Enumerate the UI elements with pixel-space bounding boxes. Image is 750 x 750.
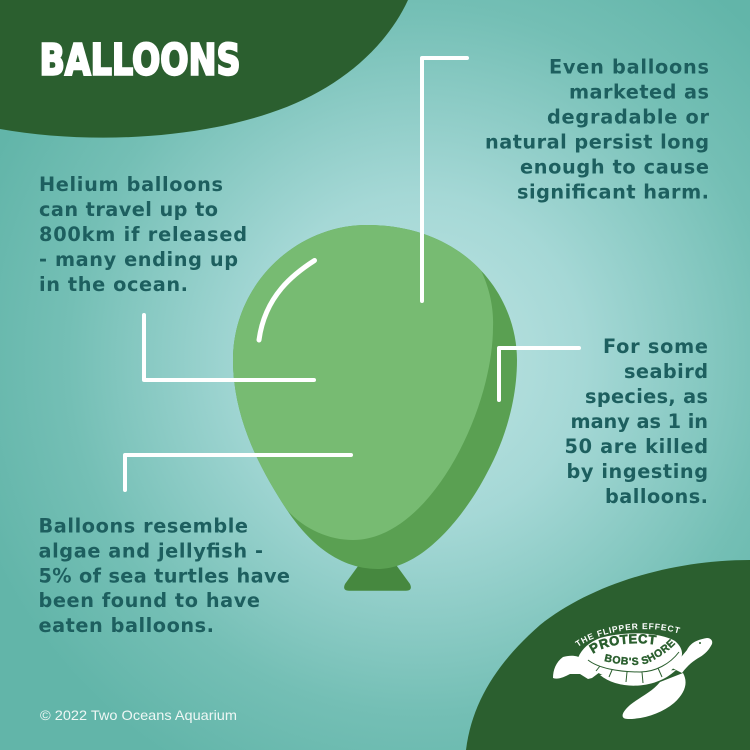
text: seabird species: many as 1 in	[570, 410, 708, 433]
balloon illustration	[233, 225, 517, 591]
text: seabird species: seabird	[624, 360, 708, 383]
text: degradable balloons: enough to cause	[520, 156, 709, 178]
text: sea turtles: been found to have	[38, 589, 260, 612]
turtle rear flipper	[553, 656, 600, 679]
text: helium balloons: can travel up to	[39, 198, 218, 221]
text: helium balloons: - many ending up	[39, 248, 238, 271]
text: seabird species	[564, 335, 708, 508]
text: degradable balloons: marketed as	[569, 80, 709, 104]
text: sea turtles	[38, 514, 290, 637]
text: degradable balloons: natural persist long	[485, 130, 709, 154]
logo heading: THE FLIPPER EFFECT	[574, 623, 680, 646]
turtle shell	[578, 633, 682, 683]
logo shore text: BOB'S SHORE	[604, 638, 676, 666]
text: helium balloons: 800km if released	[39, 223, 247, 246]
turtle belly	[600, 670, 676, 686]
shell plate lines	[588, 652, 679, 683]
text: sea turtles: eaten balloons.	[38, 614, 214, 637]
text: sea turtles: Balloons resemble	[38, 514, 248, 538]
connector: top right	[422, 58, 467, 301]
connector: middle left	[144, 315, 314, 380]
bottom-right corner panel	[466, 560, 750, 750]
text: helium balloons: Helium balloons	[39, 173, 223, 196]
connector: bottom left	[125, 455, 351, 490]
text: degradable balloons: Even balloons	[549, 56, 709, 78]
connector: middle right	[499, 348, 579, 400]
text: seabird species: by ingesting	[566, 460, 708, 483]
top-left title panel	[0, 0, 408, 138]
text: degradable balloons: degradable or	[547, 106, 709, 128]
logo protect text: PROTECT	[588, 634, 657, 654]
turtle eye	[699, 642, 701, 644]
balloon shadow	[233, 225, 517, 569]
logo: turtle	[553, 623, 712, 719]
text: sea turtles: algae and jellyfish -	[38, 540, 263, 562]
balloon body	[233, 225, 493, 540]
balloon knot	[344, 562, 411, 591]
text: sea turtles: 5% of sea turtles have	[38, 564, 290, 588]
text: degradable balloons	[485, 56, 709, 204]
turtle head and neck	[672, 638, 712, 673]
text: seabird species: balloons.	[605, 485, 708, 508]
text: seabird species: species, as	[585, 385, 708, 408]
text: helium balloons: in the ocean.	[39, 273, 188, 296]
text: seabird species: For some	[603, 335, 708, 358]
copyright: © 2022 Two Oceans Aquarium	[40, 707, 237, 723]
text: seabird species: 50 are killed	[564, 435, 708, 458]
turtle front flipper	[623, 673, 686, 719]
balloon highlight	[259, 260, 314, 340]
text: helium balloons	[39, 173, 247, 296]
title: BALLOONS	[40, 36, 240, 86]
text: degradable balloons: significant harm.	[517, 180, 709, 204]
